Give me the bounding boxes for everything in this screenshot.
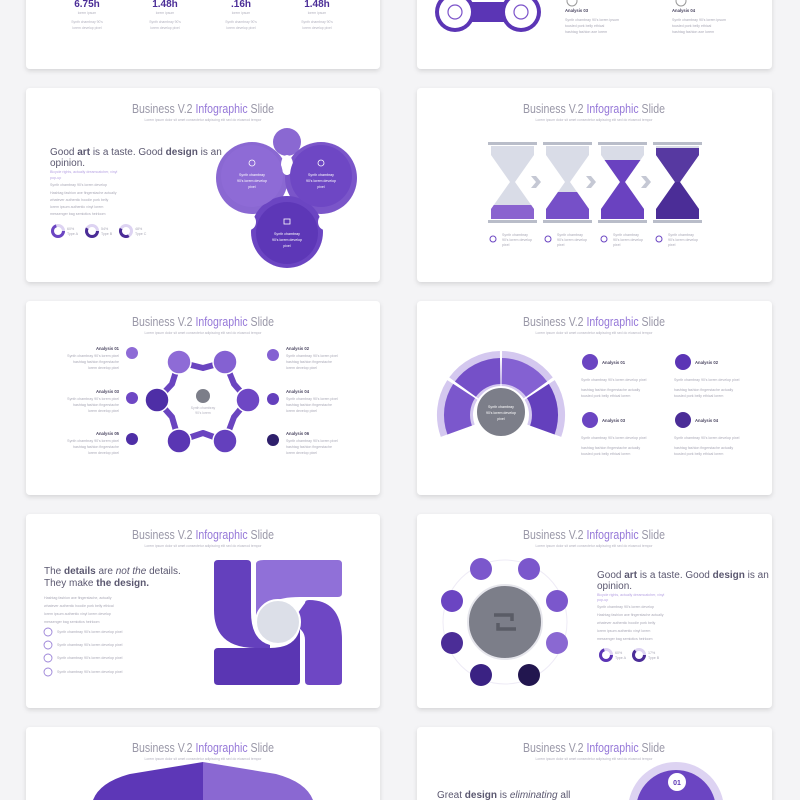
panel: pinwheel card: Lorem ipsum dolor sit amet consectetur adipiscing elit sed do eiusmod tempor: [144, 544, 262, 548]
three circles diagram: 90's lorem develop: [237, 179, 267, 183]
right analysis items: lorem develop pixel: [286, 451, 317, 455]
right analysis items: hashtag fashion fingerstache: [286, 360, 332, 364]
panel: cycle card: opinion.: [597, 581, 632, 592]
text block: Good art is a taste. Good design is an: [597, 570, 769, 581]
left analysis items: Analysis 03: [96, 389, 120, 394]
stat captions: lorem ipsum: [156, 11, 174, 15]
right analysis items: Synth chambray 90's lorem pixel: [286, 439, 338, 443]
circle diagram: 01: [673, 780, 681, 787]
heading: The details are not the details.: [44, 566, 181, 577]
stat captions: lorem develop pixel: [226, 26, 256, 30]
three circles diagram: [216, 128, 357, 268]
donut stats: Type B: [101, 232, 113, 236]
left analysis items: lorem develop pixel: [88, 366, 119, 370]
stat captions: lorem develop pixel: [150, 26, 180, 30]
three circles diagram: 90's lorem develop: [306, 179, 336, 183]
title: Business V.2 Infographic Slide: [132, 102, 274, 116]
checklist: Synth chambray 90's lorem develop pixel: [57, 630, 123, 634]
left analysis items: Synth chambray 90's lorem pixel: [67, 439, 119, 443]
legend: Synth chambray: [668, 233, 694, 237]
three circles diagram: Synth chambray: [308, 173, 334, 177]
legend: 90's lorem develop: [557, 238, 587, 242]
analysis texts: hashtag fashion axe lorem: [565, 30, 607, 34]
panel: fan diagram card: [417, 301, 772, 495]
stat captions: lorem ipsum: [78, 11, 96, 15]
analysis items: hashtag fashion fingerstache actually: [581, 388, 640, 392]
title: Business V.2 Infographic Slide: [523, 528, 665, 542]
donut stats: [52, 223, 147, 239]
analysis texts: hashtag fashion axe lorem: [672, 30, 714, 34]
right analysis items: hashtag fashion fingerstache: [286, 445, 332, 449]
fan chart: pixel: [497, 417, 505, 421]
analysis items: Synth chambray 90's lorem develop pixel: [581, 378, 647, 382]
legend: pixel: [557, 243, 565, 247]
left analysis items: hashtag fashion fingerstache: [73, 403, 119, 407]
panel: circle card (bottom-right): [417, 727, 772, 800]
donut stats: 17%: [648, 651, 656, 655]
cycle diagram: [441, 558, 568, 686]
body text: whatever authentic hoodie pork belly: [50, 198, 109, 202]
title: Business V.2 Infographic Slide: [132, 315, 274, 329]
body text: [50, 170, 118, 216]
analysis texts: Analysis 03: [565, 8, 589, 13]
dumbbell diagram: [435, 0, 541, 32]
body text: [44, 596, 114, 624]
panel: cycle card: Hashtag fashion axe fingerstache actually: [597, 613, 664, 617]
analysis items: hashtag fashion fingerstache actually: [581, 446, 640, 450]
analysis items: [581, 354, 740, 456]
panel: cycle card: Lorem ipsum dolor sit amet consectetur adipiscing elit sed do eiusmod tempor: [535, 544, 653, 548]
panel: three circles card: [26, 88, 380, 282]
three circles diagram: Synth chambray: [239, 173, 265, 177]
panel: cycle card: pop-up: [597, 598, 608, 602]
panel: roof card (bottom-left): [26, 727, 380, 800]
legend: pixel: [502, 243, 510, 247]
panel: dumbbell card (top-right): [417, 0, 772, 69]
circle diagram: [628, 762, 724, 800]
analysis items: Synth chambray 90's lorem develop pixel: [581, 436, 647, 440]
legend: Synth chambray: [502, 233, 528, 237]
checklist: Synth chambray 90's lorem develop pixel: [57, 670, 123, 674]
body text: lorem ipsum authentic vinyl lorem develop: [44, 612, 111, 616]
legend: 90's lorem develop: [613, 238, 643, 242]
body text: messenger bag semiotics heirloom: [50, 212, 106, 216]
analysis items: Synth chambray 90's lorem develop pixel: [674, 436, 740, 440]
analysis items: hashtag fashion fingerstache actually: [674, 388, 733, 392]
left analysis items: Analysis 05: [96, 431, 120, 436]
stat captions: Synth chambray 90's: [301, 20, 333, 24]
analysis items: tousled pork belly ethical lorem: [674, 394, 723, 398]
analysis texts: Synth chambray 90's lorem ipsum: [672, 18, 726, 22]
analysis texts: tousled pork belly ethical: [565, 24, 605, 28]
right analysis items: [267, 346, 338, 455]
panel: hourglass card: [417, 88, 772, 282]
roof shape: [93, 762, 313, 800]
three circles diagram: 90's lorem develop: [272, 238, 302, 242]
analysis items: Synth chambray 90's lorem develop pixel: [674, 378, 740, 382]
checklist: Synth chambray 90's lorem develop pixel: [57, 656, 123, 660]
analysis texts: tousled pork belly ethical: [672, 24, 712, 28]
legend: [490, 233, 698, 247]
analysis items: Analysis 04: [695, 418, 719, 423]
donut stats: Type C: [135, 232, 147, 236]
left analysis items: Synth chambray 90's lorem pixel: [67, 354, 119, 358]
right analysis items: hashtag fashion fingerstache: [286, 403, 332, 407]
fan chart: [437, 351, 565, 437]
right analysis items: Synth chambray 90's lorem pixel: [286, 397, 338, 401]
legend: pixel: [613, 243, 621, 247]
legend: 90's lorem develop: [502, 238, 532, 242]
donut stats: 48%: [135, 227, 143, 231]
panel: pinwheel card: They make the design.: [44, 578, 149, 589]
panel: cycle card: [417, 514, 772, 708]
stat numbers: [74, 0, 330, 10]
heading: Good art is a taste. Good design is an: [50, 147, 222, 158]
left analysis items: hashtag fashion fingerstache: [73, 445, 119, 449]
panel: cycle card: lorem ipsum authentic vinyl lorem: [597, 629, 650, 633]
title: Business V.2 Infographic Slide: [132, 528, 274, 542]
panel: hourglass card: Lorem ipsum dolor sit amet consectetur adipiscing elit sed do eiusmod tempor: [535, 118, 653, 122]
panel: circle card (bottom-right): Lorem ipsum dolor sit amet consectetur adipiscing elit sed do eiusmod tempor: [535, 757, 653, 761]
three circles diagram: Synth chambray: [274, 232, 300, 236]
donut stats: [600, 650, 660, 660]
three circles diagram: pixel: [317, 185, 325, 189]
left analysis items: [67, 346, 138, 455]
panel: cycle card: Bicycle rights, actually dreamcatcher, vinyl: [597, 593, 665, 597]
panel: pinwheel card: [26, 514, 380, 708]
left analysis items: Synth chambray 90's lorem pixel: [67, 397, 119, 401]
body text: lorem ipsum authentic vinyl lorem: [50, 205, 103, 209]
analysis items: tousled pork belly ethical lorem: [581, 452, 630, 456]
panel: stats card (top-left): [26, 0, 380, 69]
legend: Synth chambray: [613, 233, 639, 237]
body text: Bicycle rights, actually dreamcatcher, vinyl: [50, 170, 118, 174]
body text: Synth chambray 90's lorem develop: [50, 183, 107, 187]
title: Business V.2 Infographic Slide: [132, 741, 274, 755]
panel: hexagon star card: [26, 301, 380, 495]
body text: pop-up: [50, 176, 61, 180]
analysis items: tousled pork belly ethical lorem: [581, 394, 630, 398]
panel: three circles card: Lorem ipsum dolor sit amet consectetur adipiscing elit sed do eiusmod tempor: [144, 118, 262, 122]
stat captions: [71, 11, 333, 30]
star diagram: [145, 350, 260, 453]
pinwheel: [214, 560, 342, 685]
right analysis items: lorem develop pixel: [286, 366, 317, 370]
left analysis items: lorem develop pixel: [88, 409, 119, 413]
panel: cycle card: whatever authentic hoodie pork belly: [597, 621, 656, 625]
analysis items: Analysis 02: [695, 360, 719, 365]
panel: fan diagram card: Lorem ipsum dolor sit amet consectetur adipiscing elit sed do eiusmod tempor: [535, 331, 653, 335]
star diagram: Synth chambray: [191, 406, 216, 410]
right analysis items: Analysis 04: [286, 389, 310, 394]
body text: whatever authentic hoodie pork belly ethical: [44, 604, 114, 608]
hourglasses: [488, 142, 703, 223]
donut stats: Type A: [615, 656, 627, 660]
arrows: [531, 176, 651, 188]
stat captions: Synth chambray 90's: [71, 20, 103, 24]
panel: roof card (bottom-left): Lorem ipsum dolor sit amet consectetur adipiscing elit sed do eiusmod tempor: [144, 757, 262, 761]
right analysis items: Analysis 06: [286, 431, 310, 436]
fan chart: 90's lorem develop: [486, 411, 516, 415]
stat captions: Synth chambray 90's: [225, 20, 257, 24]
analysis texts: [565, 0, 726, 34]
donut stats: Type A: [67, 232, 79, 236]
donut stats: 60%: [615, 651, 623, 655]
body text: messenger bag semiotics heirloom: [44, 620, 100, 624]
analysis texts: Analysis 04: [672, 8, 696, 13]
donut stats: Type B: [648, 656, 660, 660]
right analysis items: lorem develop pixel: [286, 409, 317, 413]
title: Business V.2 Infographic Slide: [523, 741, 665, 755]
right analysis items: Synth chambray 90's lorem pixel: [286, 354, 338, 358]
donut stats: 60%: [67, 227, 75, 231]
panel: cycle card: Synth chambray 90's lorem develop: [597, 605, 654, 609]
analysis texts: Synth chambray 90's lorem ipsum: [565, 18, 619, 22]
title: Business V.2 Infographic Slide: [523, 102, 665, 116]
left analysis items: hashtag fashion fingerstache: [73, 360, 119, 364]
body text: Hashtag fashion axe fingerstache, actually: [44, 596, 112, 600]
fan chart: Synth chambray: [488, 405, 514, 409]
panel: hexagon star card: Lorem ipsum dolor sit amet consectetur adipiscing elit sed do eiusmod tempor: [144, 331, 262, 335]
analysis items: tousled pork belly ethical lorem: [674, 452, 723, 456]
donut stats: 54%: [101, 227, 109, 231]
title: Business V.2 Infographic Slide: [523, 315, 665, 329]
legend: pixel: [668, 243, 676, 247]
right analysis items: Analysis 02: [286, 346, 310, 351]
three circles diagram: pixel: [283, 244, 291, 248]
stat captions: Synth chambray 90's: [149, 20, 181, 24]
stat captions: lorem ipsum: [308, 11, 326, 15]
panel: three circles card: opinion.: [50, 158, 85, 169]
checklist: [44, 628, 123, 676]
legend: 90's lorem develop: [668, 238, 698, 242]
analysis items: Analysis 01: [602, 360, 626, 365]
star diagram: 90's lorem: [195, 411, 211, 415]
checklist: Synth chambray 90's lorem develop pixel: [57, 643, 123, 647]
legend: Synth chambray: [557, 233, 583, 237]
analysis items: Analysis 03: [602, 418, 626, 423]
three circles diagram: pixel: [248, 185, 256, 189]
left analysis items: Analysis 01: [96, 346, 120, 351]
left analysis items: lorem develop pixel: [88, 451, 119, 455]
stat captions: lorem develop pixel: [302, 26, 332, 30]
stat captions: lorem develop pixel: [72, 26, 102, 30]
analysis items: hashtag fashion fingerstache actually: [674, 446, 733, 450]
stat captions: lorem ipsum: [232, 11, 250, 15]
panel: cycle card: messenger bag semiotics heirloom: [597, 637, 653, 641]
body text: Hashtag fashion axe fingerstache actually: [50, 191, 117, 195]
